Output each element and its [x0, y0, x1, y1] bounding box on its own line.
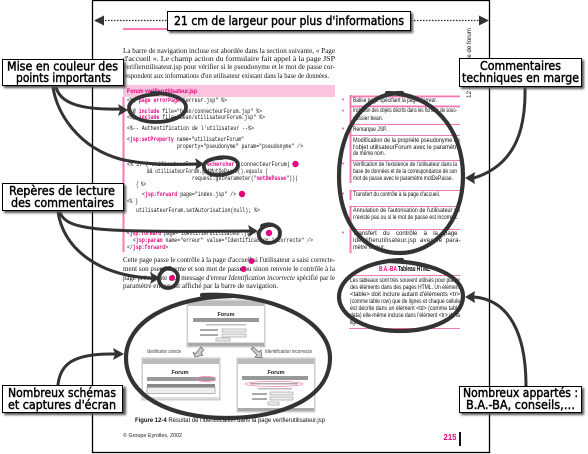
code listing: utilisateurForum.setAutorisation(null); %> [136, 207, 260, 214]
code listing: </jsp:forward> [127, 244, 168, 251]
margin comments: base de données et de la correspondance de son [353, 169, 457, 175]
screenshot: login error [237, 358, 315, 412]
title box [168, 12, 413, 33]
arrow: to paragraph marker [58, 212, 160, 284]
screenshot: login form: Forum [217, 312, 235, 318]
callout: Nombreux schémas: et captures d'écran [8, 398, 116, 412]
screenshot: successful login [142, 358, 220, 400]
margin comments: mot de passe avec le paramètre motDePasse. [353, 176, 453, 182]
screenshot: login form [187, 300, 265, 347]
callout: Nombreux apartés: Nombreux appartés : [463, 386, 578, 400]
intro paragraph: d'accueil ». Le champ action du formulaire fait appel à la page JSP [123, 55, 335, 63]
code listing: <% if ( utilisateurForum.rechercher (connecteurForum) [127, 161, 290, 168]
sidebar: Tableau HTML: Les tableaux sont très souvent utilisés pour placer [350, 278, 460, 284]
highlight circle: includes [129, 93, 186, 122]
callout: Mise en couleur [2, 60, 126, 88]
margin comments: n'existe pas ou si le mot de passe est incorrect. [353, 215, 458, 221]
callout: Nombreux schémas [2, 386, 126, 415]
margin comments: Balise page spécifiant la page d'erreur. [353, 98, 437, 104]
margin comments: mètre erreur. [353, 245, 385, 251]
code listing: request.getParameter("motDePasse"))) [192, 175, 298, 182]
margin comments: identifierutilisateur.jsp avec le para- [353, 238, 461, 244]
sidebar: Tableau HTML: data) elle-même incluse dans l'élément <tr> de la [350, 313, 461, 319]
code listing [122, 97, 313, 252]
callout: Nombreux apartés [460, 386, 584, 415]
code listing: { %> [136, 181, 146, 188]
explanation paragraph: ment son pseudonyme et son mot de passe ou sinon renvoie le contrôle à la [123, 265, 336, 273]
screenshot: login error: Forum [267, 370, 285, 376]
callout: Mise en couleur: points importants [16, 71, 111, 85]
code listing: <jsp:forward page="identifierutilisateur.jsp"> [127, 230, 258, 237]
code listing: <%-- Authentification de l'utilisateur --%> [127, 125, 254, 132]
width arrow [94, 16, 489, 26]
code listing heading: Forum verifierutilisateur.jsp [127, 88, 197, 95]
screenshot: successful login: Forum [171, 370, 189, 376]
page outline [92, 0, 490, 452]
margin comments: Inclusion des objets décrits dans les fichiers de sous- [353, 108, 457, 114]
explanation paragraph: paramètre erreur est affiché par la barre de navigation. [123, 282, 278, 290]
margin comments: Transfert du contrôle à la page d'accueil. [353, 192, 440, 198]
code listing: <%@ include file="bean/connecteurForum.jsp" %> [127, 108, 262, 115]
callout: Repères de lecture [2, 184, 126, 213]
margin comments: de même nom. [353, 151, 385, 157]
highlight circle: marker 3 [259, 224, 280, 243]
sidebar: Tableau HTML: est décrite dans un élément <td> (comme table [350, 306, 461, 312]
sidebar: Tableau HTML: B.A.-BA Tableau HTML [379, 266, 430, 273]
explanation paragraph: page précédente . Le message d'erreur Identification incorrecte spécifié par le [123, 274, 335, 282]
code listing: && utilisateurForum.getMotDePasse().equals ( [147, 168, 268, 175]
highlight ellipse: screenshots [126, 295, 330, 418]
code listing: <% } [127, 198, 138, 205]
screenshot caption: failure: Identification incorrecte [265, 349, 312, 355]
intro paragraph: La barre de navigation incluse est abordée dans la section suivante, « Page [123, 47, 335, 55]
intro paragraph: respondent aux informations d'un utilisateur existant dans la base de données. [123, 72, 329, 80]
callout: Commentaires techniques: Commentaires [480, 59, 561, 73]
highlight ellipse: sidebar [339, 260, 463, 331]
figure caption: Figure 12-4 Résultat de l'identification dans la page verifierutilisateur.jsp [135, 418, 326, 424]
arrow: to sidebar [465, 291, 526, 386]
sidebar: Tableau HTML: des éléments dans des pages HTML. Un élément [350, 285, 460, 291]
sidebar: Tableau HTML: ligne. [350, 320, 362, 326]
callout: Repères de lecture: des commentaires [11, 196, 114, 210]
code listing: <jsp:param name="erreur" value="Identification incorrecte" /> [133, 237, 313, 244]
highlight circle: rechercher [204, 157, 238, 175]
page number: 215 [444, 433, 457, 442]
sidebar: Tableau HTML [349, 266, 461, 329]
intro paragraph [123, 47, 336, 80]
screenshot caption: success: Identification correcte [147, 349, 181, 355]
screenshot arrow: left [193, 347, 204, 357]
margin comments: l'objet utilisateurForum avec le paramètre [353, 145, 461, 151]
highlight circle: marker in paragraph [159, 268, 178, 288]
code listing: property="pseudonyme" param="pseudonyme" /> [177, 143, 303, 150]
screenshot arrow: right [251, 347, 262, 358]
code markers [239, 161, 299, 236]
margin comments: dossier bean. [353, 116, 383, 122]
code listing: <%@ page errorPage="erreur.jsp" %> [127, 97, 227, 104]
arrow: to marker 3 [60, 212, 258, 237]
arrow: to margin comments [465, 87, 525, 184]
explanation paragraph: Cette page passe le contrôle à la page d'accueil si l'utilisateur a saisi correcte- [123, 256, 336, 264]
callout: Commentaires techniques [460, 58, 584, 89]
arrow: to screenshots [58, 348, 124, 385]
code listing: <%@ include file="bean/utilisateurForum.jsp" %> [127, 114, 265, 121]
callout: Nombreux apartés: B.A.-BA, conseils,… [466, 398, 575, 412]
title box: 21 cm de largeur pour plus d'informations [174, 14, 404, 28]
explanation paragraph [123, 256, 336, 290]
running header: 12 – Formulaire de forum [467, 28, 473, 98]
highlight ellipse: margin comments [339, 93, 463, 253]
callout: Commentaires techniques: techniques en marge [462, 71, 579, 85]
callout: Mise en couleur: Mise en couleur des [7, 60, 118, 74]
sidebar: Tableau HTML: (comme table row) que de lignes et chaque cellule [350, 299, 461, 305]
sidebar: Tableau HTML: <table> doit inclure autant d'éléments <tr> [350, 292, 460, 298]
margin comments [342, 95, 461, 253]
callout: Repères de lecture: Repères de lecture [9, 184, 115, 198]
margin comments: Vérification de l'existence de l'utilisateur dans la [353, 162, 458, 168]
margin comments: Transfert du contrôle à la page [353, 231, 458, 237]
page number [444, 432, 461, 446]
code listing: <jsp:setProperty name="utilisateurForum" [127, 136, 244, 143]
arrow: to highlighted includes [56, 87, 128, 116]
arrow: to rechercher [53, 87, 204, 170]
code listing heading [123, 85, 335, 97]
copyright: © Groupe Eyrolles, 2002 [123, 432, 182, 439]
callout: Nombreux schémas: Nombreux schémas [8, 386, 116, 400]
pink header rule [123, 28, 169, 30]
intro paragraph: verifierutilisateur.jsp pour vérifier si le pseudonyme et le mot de passe cor- [123, 63, 336, 71]
margin comments: Annulation de l'autorisation de l'utilisateur s'il [353, 208, 460, 214]
code listing: <jsp:forward page="index.jsp" /> [142, 191, 236, 198]
margin comments: Modification de la propriété pseudonyme de [353, 138, 461, 144]
margin comments: Remarque JSP. [353, 127, 387, 133]
